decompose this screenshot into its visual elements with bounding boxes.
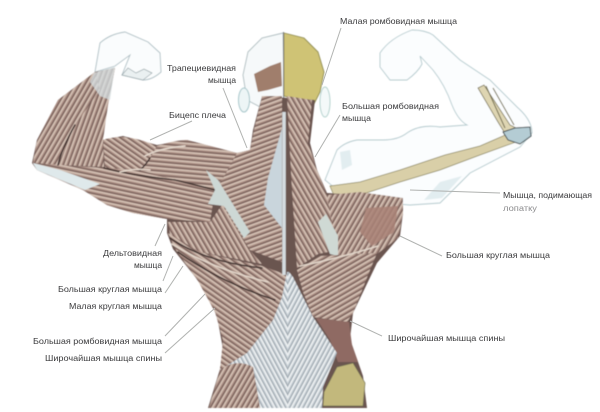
label: Levator scapulae: Мышца, подимающая <box>503 190 592 200</box>
label: Rhomboid major top: мышца <box>342 113 371 123</box>
scapular tendons <box>318 214 338 256</box>
label: Teres major right <box>400 236 550 260</box>
upper back left <box>168 96 287 370</box>
label: Levator scapulae: лопатку <box>503 203 538 213</box>
label: Rhomboid minor top <box>322 16 457 85</box>
label: Rhomboid major left: Большая ромбовидная мышца <box>33 336 162 346</box>
lat bands <box>170 238 275 300</box>
neck fascia <box>264 128 282 228</box>
upper back right <box>287 96 403 362</box>
elbow tendon <box>33 163 100 190</box>
trapezius <box>287 96 338 268</box>
label: Teres major left <box>58 256 173 294</box>
right ear <box>320 87 330 117</box>
wrist tendons <box>90 66 115 100</box>
label: Trapezius: Трапециевидная <box>167 63 236 73</box>
trapezius <box>215 96 282 262</box>
left hand <box>95 32 161 80</box>
lower back fascia <box>220 272 337 408</box>
label: Rhomboid major top <box>315 101 439 157</box>
label: Biceps <box>150 110 226 140</box>
right forearm bones <box>330 85 531 198</box>
left buttock <box>209 363 260 408</box>
label: Teres major right: Большая круглая мышца <box>446 250 550 260</box>
label: Deltoid: мышца <box>134 260 162 270</box>
label: Trapezius: мышца <box>208 75 236 85</box>
label: Latissimus left <box>45 308 215 363</box>
label: Biceps: Бицепс плеча <box>169 110 226 120</box>
right arm: pale outline <box>325 30 532 205</box>
label: Deltoid <box>103 224 165 270</box>
forearm flexors <box>58 68 115 167</box>
scalp muscle patch <box>254 62 282 92</box>
label: Rhomboid minor top: Малая ромбовидная мышца <box>340 16 457 26</box>
left ear <box>238 88 250 112</box>
forearm outer <box>33 72 100 165</box>
torso and arm silhouette <box>32 68 403 408</box>
label: Levator scapulae <box>410 190 592 213</box>
label: Rhomboid major top: Большая ромбовидная <box>342 101 439 111</box>
flank <box>316 318 358 362</box>
label: Rhomboid major left <box>33 294 205 346</box>
deltoid <box>140 140 237 190</box>
label: Deltoid: Дельтовидная <box>103 248 162 258</box>
lat band <box>300 246 378 266</box>
left side of skull <box>243 33 284 108</box>
triceps band <box>33 163 215 222</box>
right iliac bone <box>323 363 365 406</box>
spine line <box>282 112 286 275</box>
label: Teres major left: Большая круглая мышца <box>58 284 162 294</box>
scapula muscles <box>327 192 403 256</box>
label: Latissimus right <box>350 321 505 343</box>
label: Latissimus right: Широчайшая мышца спины <box>388 333 505 343</box>
latissimus dorsi <box>297 253 377 322</box>
latissimus dorsi <box>168 233 287 370</box>
pink infraspinatus <box>360 206 398 246</box>
head <box>238 32 330 117</box>
label: Trapezius <box>167 63 247 148</box>
label: Teres minor left: Малая круглая мышца <box>69 301 162 311</box>
label: Teres minor left <box>69 266 183 311</box>
shaded patches <box>340 150 462 200</box>
muscle borders <box>58 125 215 190</box>
right side of skull <box>284 33 324 104</box>
scapular tendon <box>206 170 250 238</box>
left arm muscles <box>33 66 237 222</box>
label: Latissimus left: Широчайшая мышца спины <box>45 353 162 363</box>
anatomical figure <box>32 30 532 408</box>
infraspinatus <box>168 205 262 264</box>
biceps <box>103 137 157 170</box>
